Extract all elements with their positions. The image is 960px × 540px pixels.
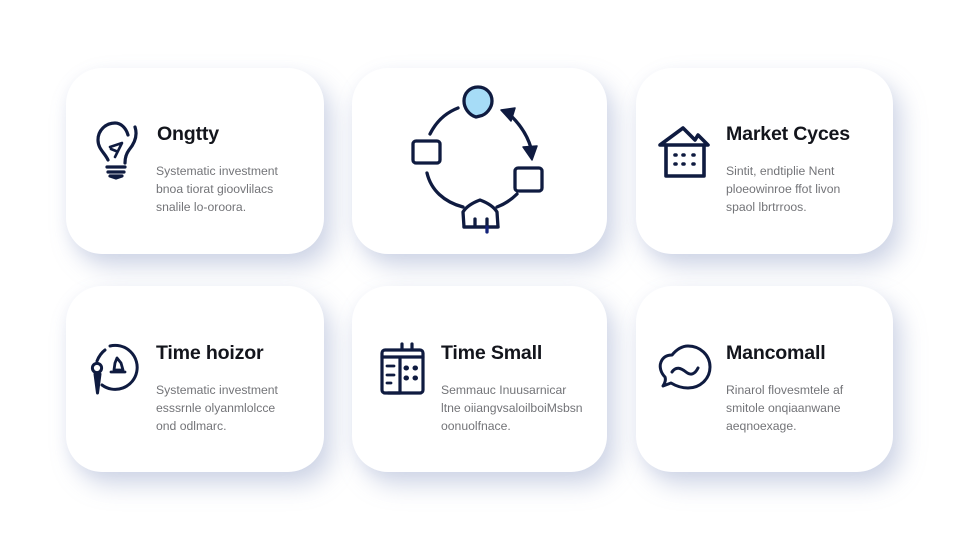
top node xyxy=(464,87,492,117)
text block: ond odlmarc. xyxy=(156,419,226,433)
right node xyxy=(515,168,542,191)
text block: ltne oiiangvsaloilboiMsbsn xyxy=(441,401,583,415)
panel: Mancomall xyxy=(636,286,893,472)
left node xyxy=(413,141,440,163)
text block: Systematic investment xyxy=(156,383,278,397)
icon: house xyxy=(658,126,710,178)
heading: Ongtty xyxy=(157,123,219,145)
text block: smitole onqiaanwane xyxy=(726,401,841,415)
text block: ploeowinroe ffot livon xyxy=(726,182,840,196)
text block xyxy=(441,383,583,433)
text block: bnoa tiorat gioovlilacs xyxy=(156,182,273,196)
icon: speech bubble xyxy=(658,344,712,390)
text block: esssrnle olyanmlolcce xyxy=(156,401,275,415)
text block: oonuolfnace. xyxy=(441,419,511,433)
text block: aeqnoexage. xyxy=(726,419,796,433)
text block: snalile lo-oroora. xyxy=(156,200,246,214)
icon: calendar xyxy=(380,342,425,395)
text block: spaol lbrtrroos. xyxy=(726,200,807,214)
text block: Semmauc Inuusarnicar xyxy=(441,383,566,397)
text block: Sintit, endtiplie Nent xyxy=(726,164,834,178)
text block: Rinarol flovesmtele af xyxy=(726,383,843,397)
heading: Mancomall xyxy=(726,342,825,364)
icon: cycle diagram xyxy=(411,85,544,234)
heading: Market Cyces xyxy=(726,123,850,145)
panel: Time Small xyxy=(352,286,607,472)
panel: Ongtty xyxy=(66,68,324,254)
panel: Time horizon xyxy=(66,286,324,472)
text block xyxy=(156,383,278,433)
text block xyxy=(156,164,278,214)
bottom node xyxy=(463,200,498,227)
arrowheads xyxy=(501,108,515,121)
text block: Systematic investment xyxy=(156,164,278,178)
text block xyxy=(726,164,840,214)
heading: Time hoizor xyxy=(156,342,263,364)
heading: Time Small xyxy=(441,342,542,364)
icon: light bulb xyxy=(96,121,138,180)
panel: cycle diagram xyxy=(352,68,607,254)
icon: clock with bell xyxy=(90,344,139,394)
panel: Market Cycles xyxy=(636,68,893,254)
text block xyxy=(726,383,844,433)
